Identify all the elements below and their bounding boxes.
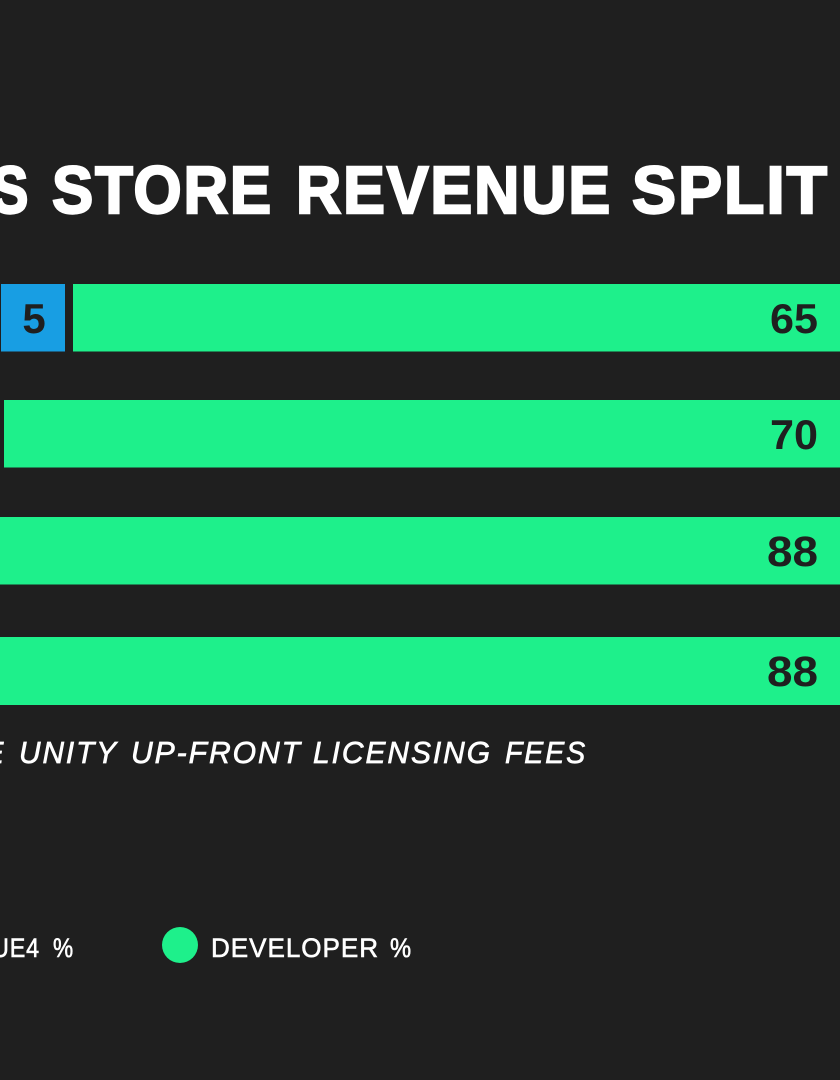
legend: UE4 label	[0, 933, 74, 963]
segment: developer 65	[73, 284, 840, 352]
bar row 4: developer 88: 88	[767, 648, 818, 696]
segment: UE4 5	[1, 284, 65, 352]
title: SPLIT	[632, 153, 829, 228]
legend: developer	[162, 927, 412, 963]
bar row 3: developer 88	[0, 517, 840, 584]
bar row 2: developer 70: 70	[770, 411, 818, 458]
title	[0, 153, 829, 228]
bar row 3: developer 88: 88	[767, 528, 818, 576]
footnote: LICENSING	[313, 735, 492, 770]
bar row 2: developer 70	[4, 400, 840, 468]
title: STORE	[52, 153, 273, 228]
segment: developer 65: 65	[770, 295, 818, 342]
footnote: UP-FRONT	[131, 735, 302, 770]
segment: UE4 5: 5	[22, 295, 46, 342]
bar row 4: developer 88	[0, 637, 840, 705]
footnote: UNITY	[19, 735, 118, 770]
icon: developer swatch	[162, 927, 198, 963]
bar row 1: 5 and 65	[1, 284, 840, 352]
footnote	[0, 735, 587, 770]
label: developer: DEVELOPER	[211, 933, 379, 963]
label: developer: %	[390, 933, 412, 963]
footnote: FEES	[505, 735, 587, 770]
legend: UE4 label: %	[53, 933, 74, 963]
title: REVENUE	[296, 153, 612, 228]
